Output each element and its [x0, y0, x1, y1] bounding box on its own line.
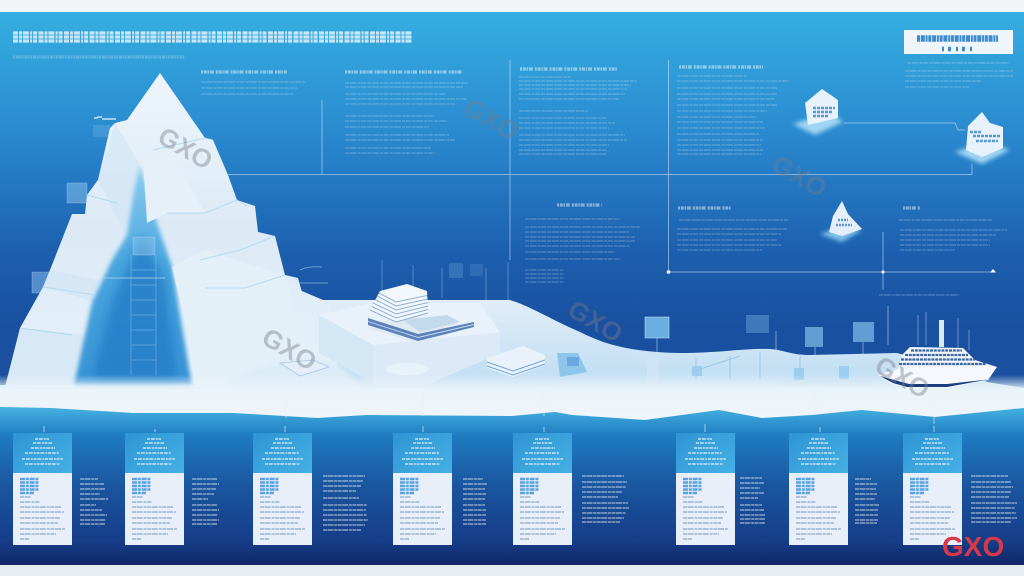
- subtitle: [13, 55, 185, 59]
- small floating data labels around iceberg: [32, 117, 328, 293]
- connector lines: [228, 60, 996, 290]
- title: [13, 33, 412, 41]
- iceberg: [5, 73, 340, 387]
- icon: mini iceberg 1: [793, 89, 843, 135]
- oval pad: [385, 363, 429, 375]
- iceberg shaded left faces: [5, 123, 140, 387]
- sea: [0, 407, 1024, 565]
- lower deck dark stripes: [368, 318, 474, 341]
- callout box: top right: [904, 30, 1013, 54]
- low mound at iceberg foot: [210, 358, 365, 392]
- text block: lower middle: [525, 205, 640, 282]
- watermark: GXO repeated: GXO: [563, 294, 628, 349]
- small crate left: [280, 360, 329, 376]
- text block: under callout: [905, 63, 1013, 87]
- card 1: [13, 433, 108, 545]
- logo: GXO: GXO: [942, 531, 1004, 562]
- central facility: [280, 284, 545, 385]
- floating data panels right: [645, 295, 959, 356]
- text block: lower right: [899, 208, 1007, 250]
- ship: [878, 312, 997, 388]
- iceberg hanging white facet: [143, 150, 205, 223]
- text block: lower centre: [677, 208, 788, 250]
- iceberg crevasse: [74, 165, 192, 385]
- machine and shelf equipment: [557, 352, 872, 386]
- card 2: [125, 433, 219, 545]
- small crate right: [487, 346, 545, 377]
- distant masts and data labels behind the shelf: [382, 260, 508, 300]
- card 8: [903, 433, 1017, 545]
- iceberg ledge lines: [20, 138, 285, 335]
- icon: mini iceberg 3: [820, 201, 862, 242]
- drop lines and arrows to cards: [44, 390, 934, 432]
- lower deck plate: [367, 315, 475, 343]
- card 4: [393, 433, 487, 545]
- sea ice foreground band: [0, 375, 1024, 420]
- iceberg deep crevasse centre: [92, 235, 178, 378]
- card 7: [789, 433, 879, 545]
- watermark: GXO repeated: GXO: [257, 322, 322, 377]
- text block: column 3: [519, 69, 637, 154]
- watermark: GXO repeated: [153, 92, 935, 405]
- text block: column 1: [201, 72, 305, 94]
- deck roof panel: [403, 315, 460, 332]
- iceberg right foreground face: [172, 250, 340, 387]
- icon: mini iceberg 2: [955, 112, 1010, 164]
- card 5: [513, 433, 629, 545]
- watermark: GXO repeated: GXO: [459, 92, 524, 147]
- card 6: [676, 433, 765, 545]
- snow shelf: [0, 286, 1024, 425]
- watermark: GXO repeated: GXO: [870, 350, 935, 405]
- upper block: [370, 284, 428, 322]
- text block: column 4: [677, 67, 789, 154]
- plinth: [319, 303, 500, 352]
- text block: column 2: [345, 72, 468, 153]
- card 3: [253, 433, 368, 545]
- watermark: GXO repeated: GXO: [153, 121, 218, 176]
- ladder in crevasse: [131, 255, 156, 375]
- watermark: GXO repeated: GXO: [767, 149, 832, 204]
